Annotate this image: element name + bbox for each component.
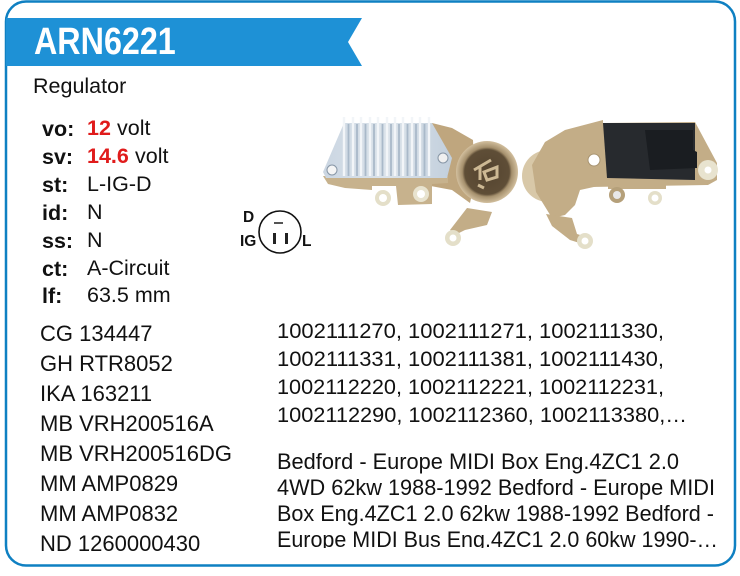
cross-reference codes list: CG 134447 (40, 321, 153, 346)
cross-reference codes list: GH RTR8052 (40, 351, 173, 376)
specification list: st: (42, 173, 68, 197)
product photo: regulator front with heat sink (323, 117, 518, 246)
subtitle: product type: Regulator (33, 74, 126, 98)
specification list: 14.6 (87, 144, 129, 168)
specification list: A-Circuit (87, 256, 169, 280)
vehicle applications block: Bedford - Europe MIDI Box Eng.4ZC1 2.0 (277, 449, 679, 474)
cross-reference codes list: MB VRH200516DG (40, 441, 232, 466)
OEM part numbers block: 1002111270, 1002111271, 1002111330, (277, 319, 664, 343)
heading ribbon: part number: ARN6221 (34, 21, 176, 63)
OEM part numbers block: 1002112220, 1002112221, 1002112231, (277, 375, 664, 399)
icon: connector pin diagram: L (302, 233, 311, 250)
product photo: regulator rear with black housing (522, 120, 718, 249)
cross-reference codes list (40, 321, 232, 556)
specification list: id: (42, 201, 68, 225)
vehicle applications block: Box Eng.4ZC1 2.0 62kw 1988-1992 Bedford - (277, 501, 714, 526)
OEM part numbers block (277, 319, 687, 427)
heading ribbon: part number (6, 18, 362, 66)
vehicle applications block: Europe MIDI Bus Eng.4ZC1 2.0 60kw 1990-… (277, 527, 718, 552)
specification list: volt (135, 144, 168, 168)
icon: connector pin diagram: IG (240, 233, 256, 250)
specification list: N (87, 228, 103, 252)
specification list: N (87, 200, 103, 224)
specification list: lf: (42, 284, 62, 308)
cross-reference codes list: MM AMP0832 (40, 501, 178, 526)
specification list: volt (117, 116, 150, 140)
cross-reference codes list: MB VRH200516A (40, 411, 214, 436)
specification list: 12 (87, 116, 111, 140)
specification list: ct: (42, 257, 68, 281)
specification list: 63.5 mm (87, 283, 171, 307)
cross-reference codes list: IKA 163211 (40, 381, 152, 406)
cross-reference codes list: ND 1260000430 (40, 531, 200, 556)
specification list: vo: (42, 117, 74, 141)
icon: connector pin diagram: D (243, 209, 254, 226)
vehicle applications block (277, 449, 718, 552)
specification list (42, 116, 171, 308)
cross-reference codes list: MM AMP0829 (40, 471, 178, 496)
vehicle applications block: 4WD 62kw 1988-1992 Bedford - Europe MIDI (277, 475, 715, 500)
icon: connector pin diagram (240, 209, 311, 253)
specification list: sv: (42, 145, 73, 169)
specification list: ss: (42, 229, 73, 253)
OEM part numbers block: 1002111331, 1002111381, 1002111430, (277, 347, 664, 371)
specification list: L-IG-D (87, 172, 152, 196)
OEM part numbers block: 1002112290, 1002112360, 1002113380,… (277, 403, 687, 427)
